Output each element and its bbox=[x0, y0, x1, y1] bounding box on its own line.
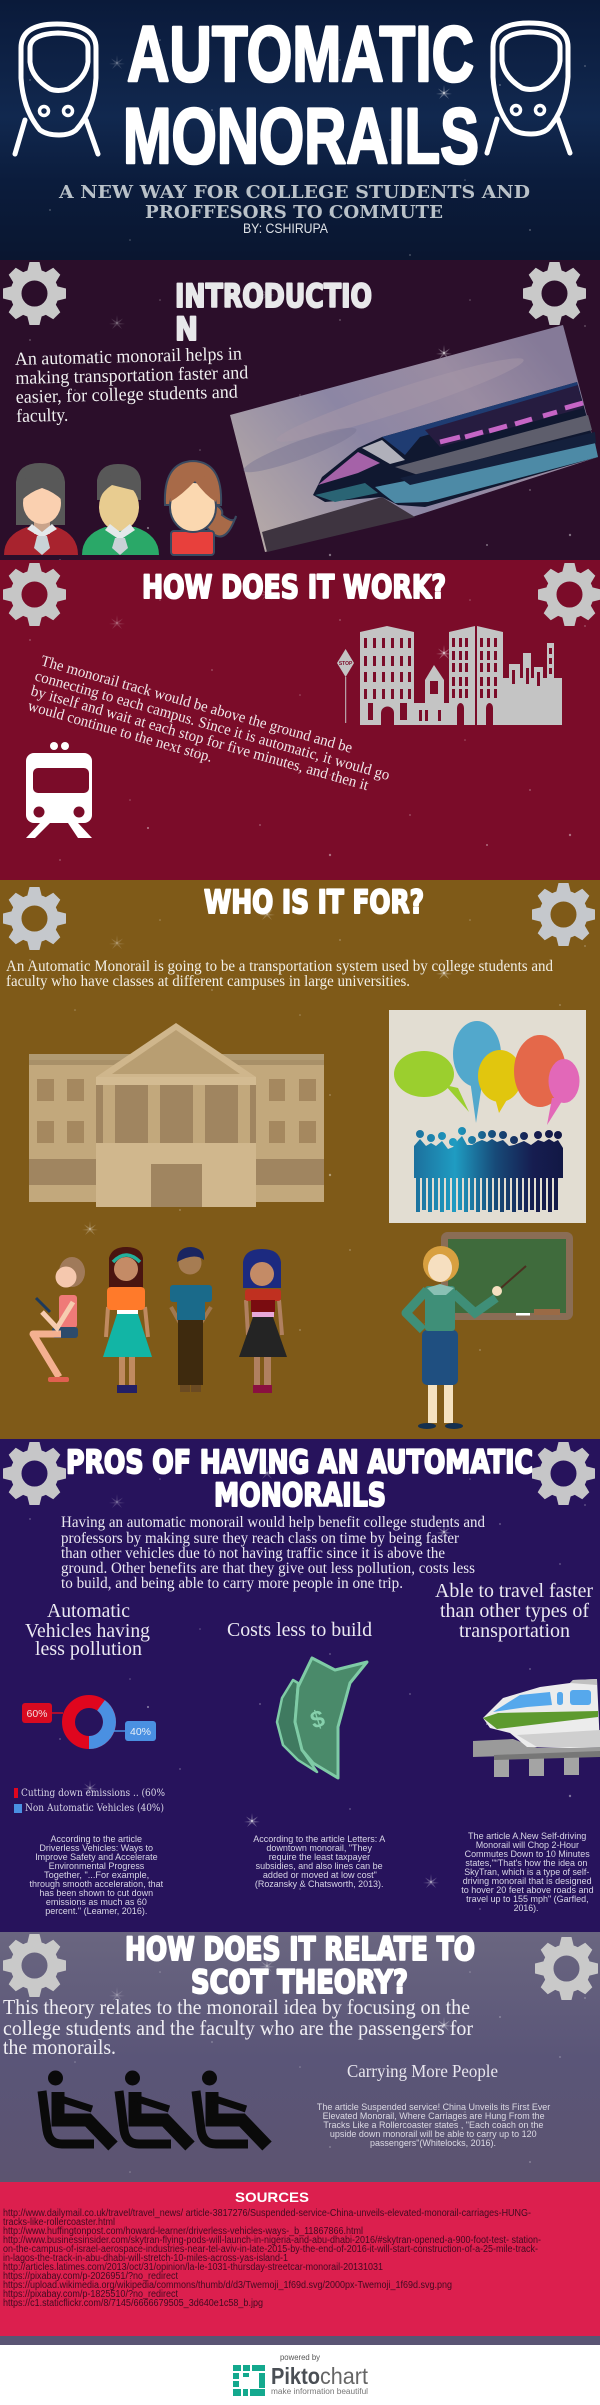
icon: man green jacket bbox=[82, 464, 159, 555]
text: pros paragraph: professors by making sure they reach class on time by being faster bbox=[61, 1530, 460, 1547]
text: pros paragraph: Having an automatic monorail would help benefit college students and bbox=[61, 1514, 485, 1531]
logo wordmark bbox=[271, 2363, 369, 2396]
text: speed citation: travel up to 155 mph" (Garfled, bbox=[466, 1894, 589, 1905]
text: cost citation: According to the article Letters: A bbox=[253, 1834, 386, 1845]
icon: passenger seats bbox=[42, 2070, 267, 2146]
subtitle: A NEW WAY FOR COLLEGE STUDENTS AND bbox=[58, 182, 530, 203]
heading: introduction bbox=[175, 277, 372, 348]
text: pollution citation: has been shown to cut down bbox=[39, 1888, 153, 1899]
text: speed citation: SkyTran, which is a type of self- bbox=[464, 1867, 589, 1878]
text: pollution citation: Driverless Vehicles: Ways to bbox=[39, 1843, 153, 1854]
text: intro paragraph: making transportation faster and bbox=[15, 363, 249, 389]
text: speed citation: Commutes Down to 10 Minutes bbox=[465, 1849, 590, 1860]
icon: money bills: $ bbox=[307, 1705, 329, 1735]
text: rotated paragraph: connecting to each campus. Since it is automatic, it would go bbox=[33, 667, 392, 784]
text: powered by: powered by bbox=[280, 2352, 321, 2362]
heading: sources: SOURCES bbox=[235, 2189, 309, 2205]
text: cost citation: added or moved at low cost" bbox=[263, 1870, 377, 1881]
illustration: crowd with speech bubbles bbox=[389, 1010, 586, 1223]
icon: money bills bbox=[277, 1658, 367, 1778]
text: source links: on-the-campus-of-israel-aerospace-industries-near-tel-aviv-in-late-2015-by-the-end-of-2016-it-will-start-construction-of-a-25-mile-track- bbox=[3, 2244, 538, 2255]
icon: white train bbox=[26, 742, 92, 838]
illustration: city skyline bbox=[337, 626, 562, 725]
panel: pros of having an automatic monorails bbox=[0, 1439, 600, 1933]
footer strip bbox=[0, 2336, 600, 2345]
panel: header bbox=[0, 0, 600, 471]
icon: green monorail train bbox=[473, 1679, 600, 1777]
text: theory paragraph: This theory relates to the monorail idea by focusing on the bbox=[3, 1995, 470, 2019]
heading: scot theory: HOW DOES IT RELATE TO bbox=[125, 1930, 475, 1968]
text: theory paragraph: college students and the faculty who are the passengers for bbox=[3, 2016, 473, 2040]
logo wordmark: make information beautiful bbox=[271, 2387, 368, 2396]
logo wordmark: Pikto bbox=[271, 2363, 320, 2389]
text: pollution citation: Together, "...For example, bbox=[44, 1870, 149, 1881]
heading: scot theory bbox=[125, 1930, 475, 2001]
text: speed citation: The article A New Self-driving bbox=[468, 1831, 586, 1842]
text: passenger citation: upside down monorail will be able to carry up to 120 bbox=[330, 2129, 537, 2140]
text: passenger citation: passengers"(Whitelocks, 2016). bbox=[370, 2138, 496, 2149]
text: intro paragraph bbox=[15, 344, 250, 427]
subtitle bbox=[58, 182, 530, 223]
icon: gear right bbox=[523, 262, 586, 325]
text: theory paragraph: the monorails. bbox=[3, 2035, 116, 2059]
icon: gear left bbox=[3, 1934, 66, 1997]
heading: pros: MONORAILS bbox=[214, 1476, 386, 1514]
text: pros paragraph bbox=[61, 1514, 485, 1592]
heading: introduction: INTRODUCTIO bbox=[175, 277, 372, 315]
title bbox=[123, 9, 479, 180]
text: who paragraph: An Automatic Monorail is going to be a transportation system used by college students and bbox=[6, 958, 553, 975]
text: intro paragraph: easier, for college students and bbox=[16, 383, 239, 408]
text: source links: https://pixabay.com/p-1825510/?no_redirect bbox=[3, 2289, 178, 2300]
text: pollution citation: percent." (Leamer, 2016). bbox=[45, 1906, 147, 1917]
illustration: student orange top bbox=[103, 1247, 152, 1393]
text: pros paragraph: than other vehicles due to not having traffic since it is above the bbox=[61, 1545, 445, 1562]
text: speed citation: 2016). bbox=[514, 1903, 538, 1914]
text: source links: tracks-like-rollercoaster.html bbox=[3, 2217, 115, 2228]
heading: introduction: N bbox=[175, 310, 198, 348]
panel: sources bbox=[0, 2182, 600, 2336]
text: intro paragraph: faculty. bbox=[16, 406, 68, 427]
text: pollution heading: less pollution bbox=[35, 1638, 142, 1660]
icon: gear right bbox=[538, 563, 600, 626]
text: source links: in-lagos-the-track-in-abu-dhabi-will-stretch-10-miles-across-yas-island-1 bbox=[3, 2253, 288, 2264]
icon: gear left bbox=[3, 1442, 66, 1505]
text: cost citation: downtown monorail, "They bbox=[266, 1843, 372, 1854]
icon: woman with headset bbox=[165, 461, 236, 555]
text: source links: http://articles.latimes.com/2013/oct/31/opinion/la-le-1031-thursday-streetcar-monorail-20131031 bbox=[3, 2262, 383, 2273]
text: carrying more people: Carrying More People bbox=[347, 2061, 498, 2081]
text: intro paragraph: An automatic monorail helps in bbox=[15, 344, 242, 370]
chart: pollution donut bbox=[22, 1702, 156, 1742]
text: source links: http://www.huffingtonpost.com/howard-learner/driverless-vehicles-ways-_b_11867866.html bbox=[3, 2226, 363, 2237]
icon: gear right bbox=[532, 1442, 595, 1505]
legend: pollution chart: Cutting down emissions .. (60% bbox=[21, 1788, 165, 1799]
text: source links: http://www.businessinsider.com/skytran-flying-pods-will-launch-in-nigeria-and-abu-dhabi-2016/#skytran-opened-a-900-foot-test- station- bbox=[3, 2235, 541, 2246]
legend: pollution chart bbox=[14, 1788, 165, 1814]
heading: scot theory: SCOT THEORY? bbox=[191, 1963, 408, 2001]
text: speed citation: to hover 20 feet above roads and bbox=[461, 1885, 594, 1896]
panel: who is it for bbox=[0, 880, 600, 1439]
legend: pollution chart: Non Automatic Vehicles (40%) bbox=[25, 1803, 164, 1814]
illustration: campus building bbox=[29, 1023, 324, 1207]
heading: who is it for: WHO IS IT FOR? bbox=[204, 883, 424, 921]
icon: gear right bbox=[532, 883, 595, 946]
icon: train front right bbox=[487, 23, 570, 153]
text: cost citation: require the least taxpayer bbox=[269, 1852, 370, 1863]
text: cost citation: subsidies, and also lines can be bbox=[256, 1861, 383, 1872]
text: cost citation bbox=[253, 1834, 386, 1890]
text: source links: https://pixabay.com/p-2026951/?no_redirect bbox=[3, 2271, 178, 2282]
text: passenger citation: Tracks Like a Rollercoaster states , "Each coach on the bbox=[323, 2120, 543, 2131]
text: speed citation: Monorail will Chop 2-Hour bbox=[476, 1840, 579, 1851]
illustration: city skyline: STOP bbox=[339, 661, 353, 667]
chart: pollution donut: 40% bbox=[130, 1726, 151, 1738]
text: rotated paragraph: The monorail track would be above the ground and be bbox=[39, 652, 354, 757]
text: passenger citation bbox=[317, 2102, 550, 2149]
illustration: student black skirt bbox=[239, 1249, 287, 1393]
text: pros paragraph: to build, and being able to carry more people in one trip. bbox=[61, 1575, 403, 1592]
text: source links: https://c1.staticflickr.com/8/7145/6666679505_3d640e1c58_b.jpg bbox=[3, 2298, 263, 2309]
text: pollution heading bbox=[25, 1600, 150, 1660]
text: passenger citation: Elevated Monorail, Where Carriages are Hung From the bbox=[323, 2111, 545, 2122]
text: speed heading: than other types of bbox=[440, 1600, 589, 1622]
panel: introduction bbox=[0, 260, 600, 731]
text: source links bbox=[3, 2208, 541, 2309]
icon: gear left bbox=[3, 563, 66, 626]
text: pollution citation: through smooth acceleration, that bbox=[30, 1879, 163, 1890]
text: cost citation: (Rozansky & Chatsworth, 2013). bbox=[255, 1879, 384, 1890]
text: pollution heading: Automatic bbox=[47, 1600, 130, 1622]
text: rotated paragraph: would continue to the next stop. bbox=[26, 697, 214, 766]
logo wordmark: chart bbox=[320, 2363, 369, 2389]
icon: gear right bbox=[535, 1937, 598, 2000]
text: who paragraph: faculty who have classes at different campuses in large universities. bbox=[6, 973, 410, 990]
text: speed heading: transportation bbox=[459, 1620, 570, 1642]
text: cost heading: Costs less to build bbox=[227, 1619, 372, 1641]
text: passenger citation: The article Suspended service! China Unveils its First Ever bbox=[317, 2102, 550, 2113]
text: pollution citation: According to the article bbox=[50, 1834, 142, 1845]
illustration: student teal shirt bbox=[170, 1247, 212, 1392]
byline: BY: CSHIRUPA bbox=[243, 221, 328, 236]
text: pollution citation: Improve Safety and Accelerate bbox=[35, 1852, 158, 1863]
text: speed citation bbox=[461, 1831, 594, 1914]
illustration: sitting student bbox=[33, 1257, 85, 1382]
photo: monorail bbox=[230, 325, 598, 552]
panel: how does it work bbox=[0, 560, 600, 1031]
text: theory paragraph bbox=[3, 1995, 473, 2059]
icon: gear left bbox=[3, 262, 66, 325]
icon: woman red jacket bbox=[4, 463, 78, 555]
text: pollution citation: emissions as much as 60 bbox=[46, 1897, 147, 1908]
text: pollution citation: Environmental Progress bbox=[49, 1861, 145, 1872]
text: speed citation: states,"“That's how the idea on bbox=[465, 1858, 587, 1869]
text: speed heading: Able to travel faster bbox=[435, 1580, 593, 1602]
chart: pollution donut: 60% bbox=[26, 1708, 48, 1720]
heading: how does it work: HOW DOES IT WORK? bbox=[142, 568, 446, 606]
subtitle: PROFFESORS TO COMMUTE bbox=[145, 202, 443, 223]
title: MONORAILS bbox=[123, 91, 479, 180]
illustration: teacher at chalkboard bbox=[406, 1236, 570, 1429]
title: AUTOMATIC bbox=[127, 9, 474, 98]
text: rotated paragraph: by itself and wait at each stop for five minutes, and then it bbox=[29, 682, 371, 794]
text: speed citation: driving monorail that is designed bbox=[463, 1876, 592, 1887]
text: source links: http://www.dailymail.co.uk/travel/travel_news/ article-3817276/Suspended-service-China-unveils-elevated-monorail-carriages-HUNG- bbox=[3, 2208, 531, 2219]
text: pollution heading: Vehicles having bbox=[25, 1620, 150, 1642]
text: speed heading bbox=[435, 1580, 593, 1642]
icon: gear left bbox=[3, 887, 66, 950]
text: pros paragraph: ground. Other benefits are that they give out less pollution, costs less bbox=[61, 1560, 475, 1577]
icon: piktochart logo bbox=[233, 2365, 265, 2396]
panel: piktochart footer bbox=[0, 2345, 600, 2405]
text: pollution citation bbox=[30, 1834, 163, 1917]
heading: pros bbox=[66, 1443, 533, 1514]
text: who paragraph bbox=[6, 958, 553, 990]
panel: scot theory bbox=[0, 1930, 600, 2403]
text: source links: https://upload.wikimedia.org/wikipedia/commons/thumb/d/d3/Twemoji_1f69d.svg/2000px-Twemoji_1f69d.svg.png bbox=[3, 2280, 452, 2291]
icon: train front left bbox=[15, 24, 98, 154]
